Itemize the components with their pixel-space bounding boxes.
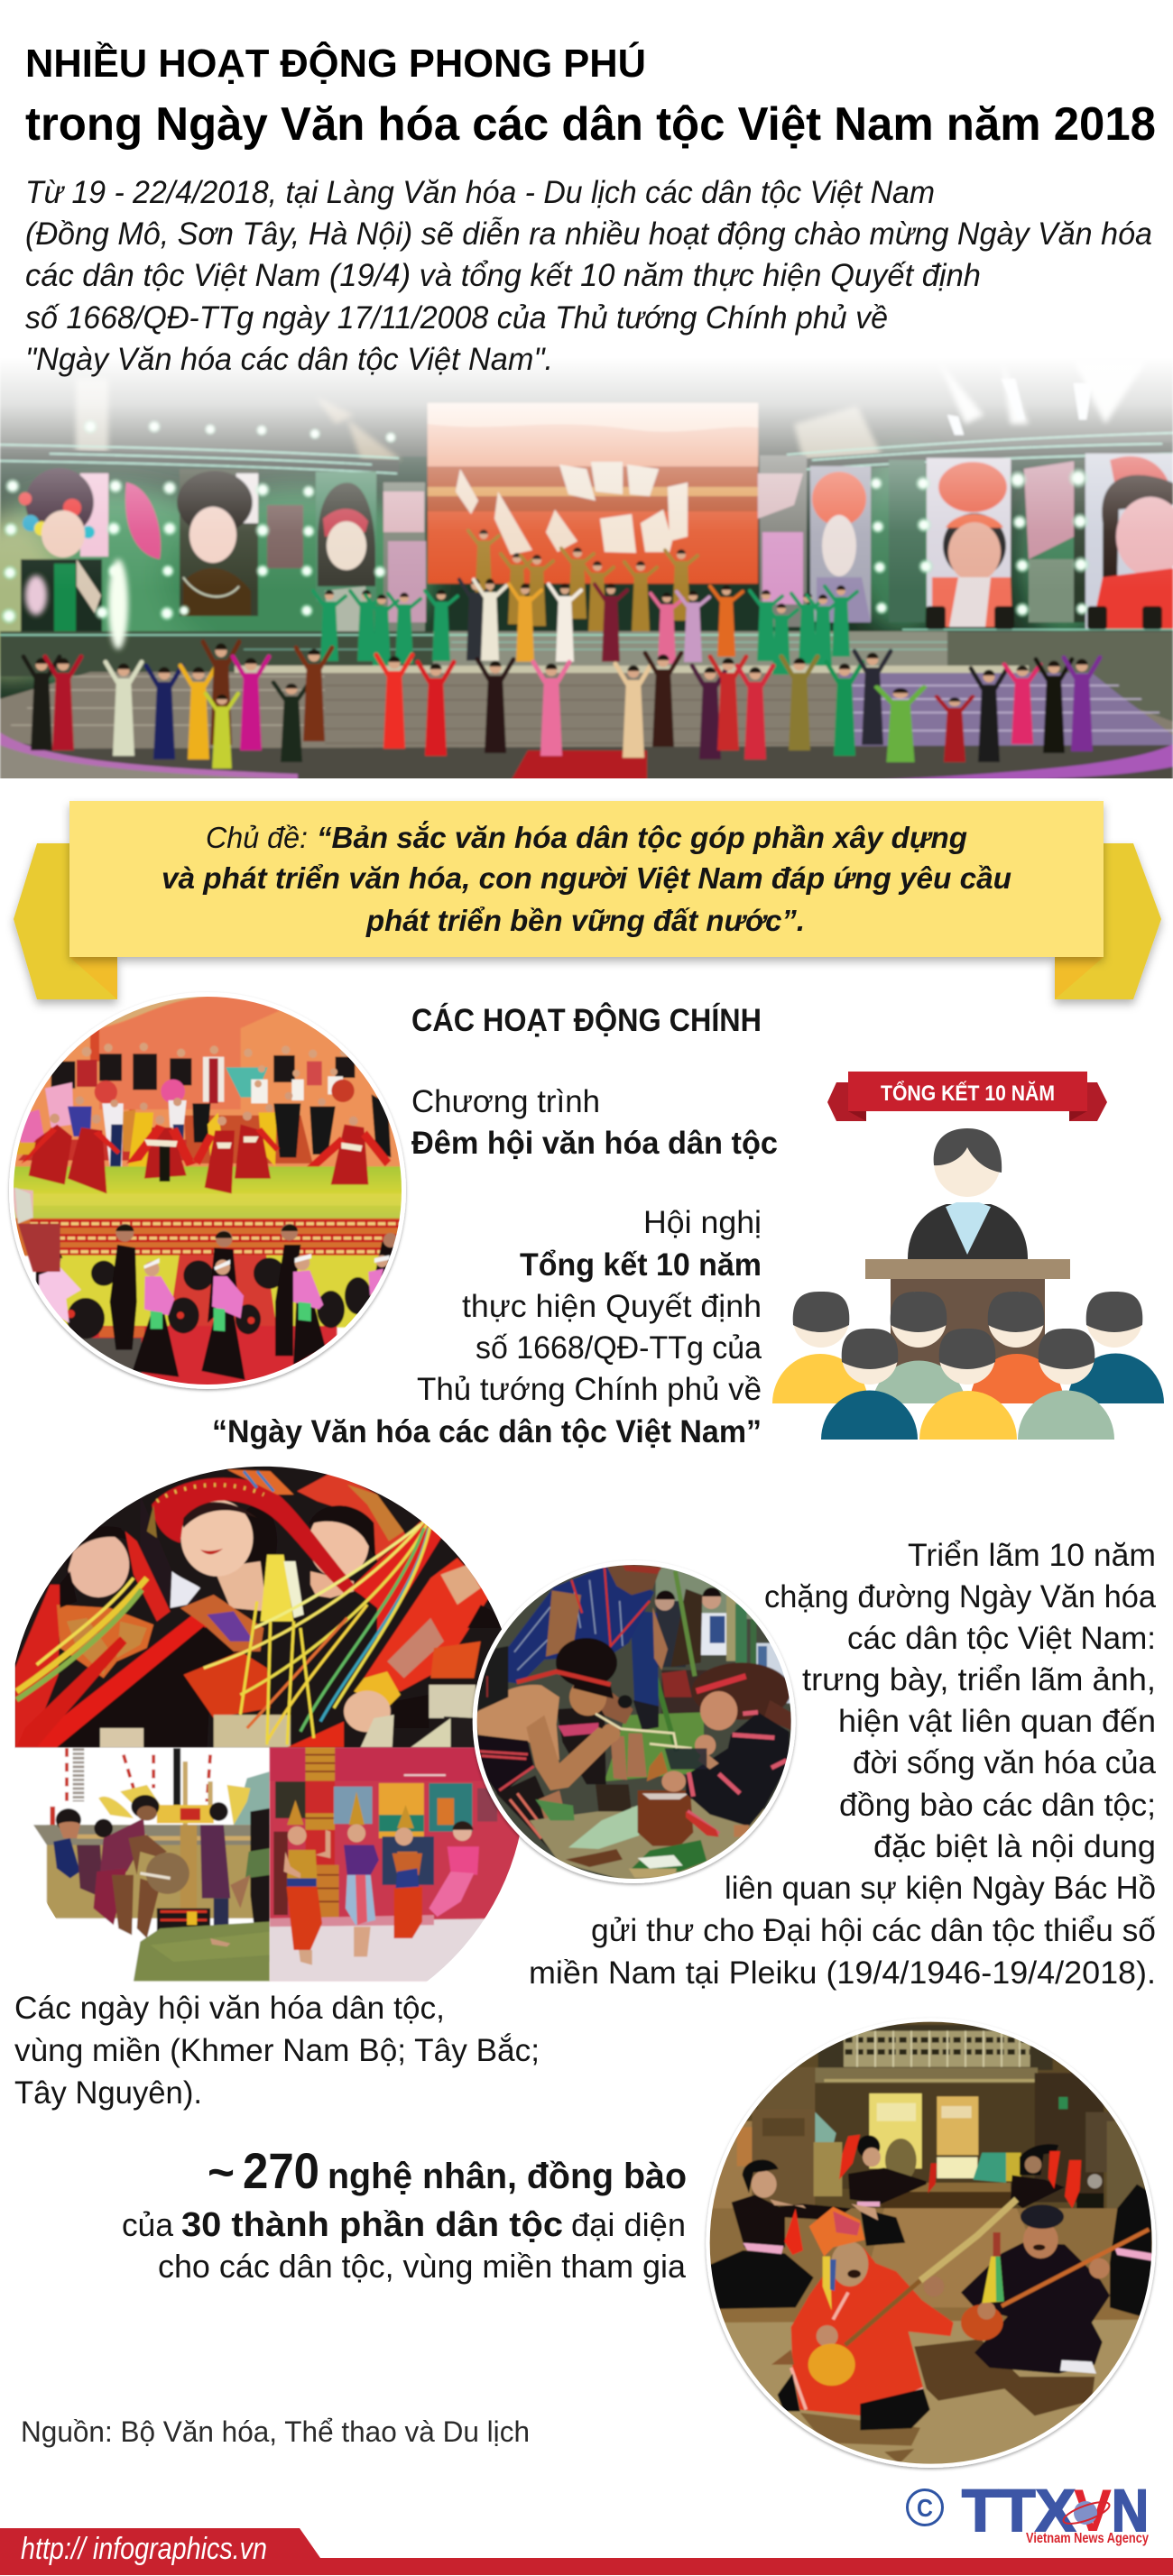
lower-right photo: temple dancers xyxy=(270,1747,537,1981)
photo collage circle: festival dancers and gong players xyxy=(0,1461,537,1981)
text: exhibition: Triển lãm 10 năm xyxy=(908,1538,1156,1573)
stage lights xyxy=(0,379,1162,649)
floor and leaves xyxy=(530,1790,776,1887)
red dancers xyxy=(29,1125,368,1193)
text: exhibition: đời sống văn hóa của xyxy=(853,1745,1157,1780)
back row on risers xyxy=(51,1053,355,1090)
text: conference xyxy=(212,1205,762,1449)
text: conference: số 1668/QĐ-TTg của xyxy=(476,1330,762,1366)
text: regional festivals xyxy=(14,1991,540,2111)
centre LED screen xyxy=(428,403,758,632)
lattice xyxy=(818,2025,1053,2070)
red sleeve and black garment xyxy=(23,1611,207,1747)
floor xyxy=(704,2208,1161,2323)
text: exhibition xyxy=(529,1538,1157,1991)
intro paragraph: "Ngày Văn hóa các dân tộc Việt Nam". xyxy=(25,342,553,377)
footer bar with url: http:// infographics.vn xyxy=(21,2532,267,2566)
front row performers xyxy=(23,642,1100,768)
intro paragraph: Từ 19 - 22/4/2018, tại Làng Văn hóa - Du lịch các dân tộc Việt Nam xyxy=(25,175,935,210)
right sleeve xyxy=(350,1522,448,1642)
text: regional festivals: vùng miền (Khmer Nam Bộ; Tây Bắc; xyxy=(14,2033,540,2068)
lower-left photo: gong players xyxy=(0,1747,270,1981)
text: exhibition: đặc biệt là nội dung xyxy=(873,1829,1156,1864)
text: conference: Thủ tướng Chính phủ về xyxy=(417,1372,762,1407)
LED screen faces left xyxy=(19,468,376,631)
coloured strings xyxy=(16,1522,430,1744)
text: night programme: Chương trình xyxy=(411,1084,600,1119)
lower floor xyxy=(60,1256,406,1328)
shirtless young man xyxy=(476,1685,559,1761)
dancer 3 xyxy=(393,1854,422,1881)
intro paragraph: số 1668/QĐ-TTg ngày 17/11/2008 của Thủ tướng Chính phủ về xyxy=(25,300,888,336)
dark left xyxy=(476,1646,508,1712)
text: number of artisans: ~ xyxy=(208,2147,235,2199)
performers in gold xyxy=(468,529,697,632)
text: exhibition: miền Nam tại Pleiku (19/4/1946-19/4/2018). xyxy=(529,1955,1156,1991)
section heading: CÁC HOẠT ĐỘNG CHÍNH xyxy=(411,1002,762,1038)
text: conference: Hội nghị xyxy=(643,1205,762,1240)
icon: red ribbon label xyxy=(827,1072,1107,1121)
elder xyxy=(630,1610,659,1709)
podium xyxy=(865,1259,1070,1369)
main girl xyxy=(309,1584,316,1596)
hero photo: stage performance xyxy=(0,357,1173,785)
text: exhibition: các dân tộc Việt Nam: xyxy=(847,1621,1156,1656)
rails xyxy=(0,433,1173,474)
theme ribbon banner: và phát triển văn hóa, con người Việt Nam đáp ứng yêu cầu xyxy=(162,861,1011,895)
text: conference: thực hiện Quyết định xyxy=(462,1289,762,1324)
stage tiers xyxy=(0,630,1173,785)
title xyxy=(25,40,1156,151)
windows xyxy=(869,2093,922,2168)
footer bar with url xyxy=(0,2528,1173,2575)
text: number of artisans: 30 thành phần dân tộc xyxy=(181,2206,563,2244)
stage decoration top xyxy=(76,361,1146,460)
yellow tassels xyxy=(261,1555,294,1622)
text: regional festivals: Các ngày hội văn hóa dân tộc, xyxy=(14,1991,445,2026)
text: exhibition: chặng đường Ngày Văn hóa xyxy=(764,1579,1157,1615)
intro paragraph: (Đồng Mô, Sơn Tây, Hà Nội) sẽ diễn ra nhiều hoạt động chào mừng Ngày Văn hóa xyxy=(25,216,1152,252)
text: number of artisans: 270 xyxy=(243,2142,319,2199)
icon: speaker at podium with audience xyxy=(772,1128,1164,1440)
text: number of artisans xyxy=(122,2142,687,2285)
left girl xyxy=(68,1532,129,1597)
floor xyxy=(0,1166,415,1219)
parasols and flowers xyxy=(95,1081,117,1103)
text: regional festivals: Tây Nguyên). xyxy=(14,2075,202,2111)
second man's skirt xyxy=(557,1707,606,1784)
text: exhibition: liên quan sự kiện Ngày Bác Hồ xyxy=(725,1871,1156,1906)
intro paragraph xyxy=(25,175,1152,377)
seated woman right xyxy=(1110,2185,1152,2320)
text: night programme xyxy=(411,1084,778,1161)
bench xyxy=(882,2183,1011,2192)
side panels xyxy=(125,455,1086,631)
photo circle: night festival dancers xyxy=(0,983,415,1401)
text: exhibition: gửi thư cho Đại hội các dân tộc thiểu số xyxy=(591,1913,1156,1948)
title: trong Ngày Văn hóa các dân tộc Việt Nam năm 2018 xyxy=(25,98,1156,151)
seated woman left xyxy=(708,2250,814,2309)
logo: TTXVN: TTX xyxy=(962,2477,1076,2544)
seated man in pink xyxy=(39,1267,81,1323)
text: number of artisans: nghệ nhân, đồng bào xyxy=(328,2157,687,2196)
middle row xyxy=(128,1109,134,1111)
text: number of artisans: của xyxy=(122,2206,174,2243)
theme ribbon banner: phát triển bền vững đất nước”. xyxy=(365,904,805,937)
text: night programme: Đêm hội văn hóa dân tộc xyxy=(411,1126,778,1161)
woman xyxy=(692,1662,791,1720)
theme ribbon banner: “Bản sắc văn hóa dân tộc góp phần xây dựng xyxy=(317,821,967,854)
text: number of artisans: cho các dân tộc, vùng miền tham gia xyxy=(158,2248,687,2285)
seated woman back right xyxy=(1011,2176,1065,2208)
audience back row xyxy=(772,1292,1164,1403)
text: number of artisans: đại diện xyxy=(571,2206,686,2243)
text: exhibition: trưng bày, triển lãm ảnh, xyxy=(802,1662,1156,1697)
singer in red xyxy=(791,2259,954,2415)
ribbon tails xyxy=(14,843,1161,999)
logo: TTXVN: N xyxy=(1112,2477,1149,2544)
photo circle: then singing performers xyxy=(704,2016,1161,2473)
source: Nguồn: Bộ Văn hóa, Thể thao và Du lịch xyxy=(21,2415,530,2448)
dancer 4 xyxy=(448,1846,479,1875)
dancer 2 xyxy=(344,1845,379,1875)
theme ribbon banner xyxy=(14,801,1161,999)
title: NHIỀU HOẠT ĐỘNG PHONG PHÚ xyxy=(25,40,646,86)
belts xyxy=(214,1715,291,1747)
men with gongs xyxy=(36,1238,397,1356)
right girl xyxy=(297,1471,406,1561)
text: conference: Tổng kết 10 năm xyxy=(520,1247,762,1283)
Greek-key band xyxy=(9,1219,406,1256)
speaker xyxy=(908,1128,1028,1259)
gongs xyxy=(67,1257,371,1339)
logo: TTXVN: V xyxy=(1074,2477,1112,2544)
icon: red ribbon label: TỔNG KẾT 10 NĂM xyxy=(881,1081,1055,1106)
pink-shirted women xyxy=(133,1302,326,1380)
text: exhibition: đồng bào các dân tộc; xyxy=(839,1788,1156,1823)
top photo: background colours xyxy=(157,1539,170,1604)
seated woman back centre xyxy=(860,2208,905,2246)
intro paragraph: các dân tộc Việt Nam (19/4) và tổng kết 10 năm thực hiện Quyết định xyxy=(25,258,981,293)
dancer 1 xyxy=(287,1850,317,1878)
text: exhibition: hiện vật liên quan đến xyxy=(838,1704,1156,1739)
logo: TTXVN: C xyxy=(917,2494,933,2522)
audience front row xyxy=(821,1329,1114,1440)
musician in black xyxy=(961,2243,1110,2374)
photo circle: ruou can ceremony xyxy=(469,1556,800,1887)
logo: TTXVN xyxy=(908,2477,1149,2546)
text: conference: “Ngày Văn hóa các dân tộc Việt Nam” xyxy=(212,1414,762,1449)
theme ribbon banner: Chủ đề: xyxy=(206,821,308,854)
LED screen faces right xyxy=(810,454,1173,629)
upper row performers xyxy=(313,579,857,675)
